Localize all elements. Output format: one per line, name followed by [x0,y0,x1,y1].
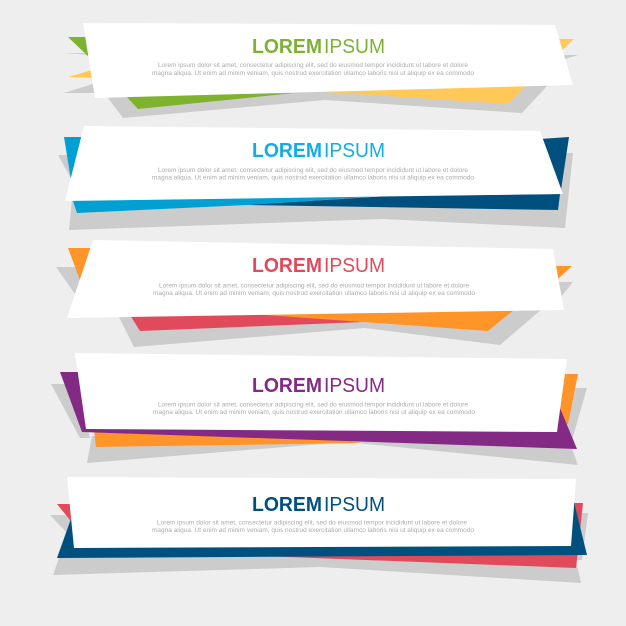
banner shadow [64,53,578,118]
body text [152,168,475,182]
body text: Lorem ipsum dolor sit amet, consectetur adipiscing elit, sed do eiusmod tempor incididunt ut labore et dolore [159,284,470,290]
white card [65,126,563,201]
heading: LOREM [252,375,322,397]
body text [152,63,475,77]
heading [252,494,385,516]
heading: LOREM [252,140,322,162]
heading: LOREM [252,494,322,516]
heading [252,36,385,58]
banner shadow [50,513,588,583]
panel: blue banner [58,126,573,230]
white card [75,353,567,432]
heading: LOREM [252,36,322,58]
panel: navy and red banner [50,477,588,583]
banner shadow [58,153,573,230]
body text: Lorem ipsum dolor sit amet, consectetur adipiscing elit, sed do eiusmod tempor incididunt ut labore et dolore [158,63,469,69]
white card [83,23,573,98]
heading: IPSUM [324,255,385,277]
banner shadow [56,267,573,347]
purple ribbon [60,372,577,449]
body text: Lorem ipsum dolor sit amet, consectetur adipiscing elit, sed do eiusmod tempor incididunt ut labore et dolore [158,402,469,408]
heading: IPSUM [324,375,385,397]
heading [252,140,385,162]
navy ribbon [57,502,587,558]
panel: red and orange banner [56,240,573,347]
body text: Lorem ipsum dolor sit amet, consectetur adipiscing elit, sed do eiusmod tempor incididunt ut labore et dolore [158,168,469,174]
dark blue ribbon [247,137,569,210]
heading: IPSUM [324,494,385,516]
orange ribbon [94,374,578,447]
body text: magna aliqua. Ut enim ad minim veniam, quis nostrud exercitation ullamco laboris nisi ut aliquip ex ea commodo [153,291,476,297]
heading [252,375,385,397]
red ribbon [57,503,583,568]
heading: IPSUM [324,36,385,58]
body text: magna aliqua. Ut enim ad minim veniam, quis nostrud exercitation ullamco laboris nisi ut aliquip ex ea commodo [152,71,475,77]
light blue ribbon [64,137,400,213]
banner shadow [51,384,587,465]
yellow ribbon [68,39,574,104]
body text: magna aliqua. Ut enim ad minim veniam, quis nostrud exercitation ullamco laboris nisi ut aliquip ex ea commodo [152,176,475,182]
red ribbon [130,312,363,331]
orange ribbon [68,248,572,331]
body text: magna aliqua. Ut enim ad minim veniam, quis nostrud exercitation ullamco laboris nisi ut aliquip ex ea commodo [152,528,475,534]
body text [153,284,476,297]
body text: magna aliqua. Ut enim ad minim veniam, quis nostrud exercitation ullamco laboris nisi ut aliquip ex ea commodo [153,410,476,416]
white card [67,477,576,548]
body text [153,402,476,416]
green ribbon [68,37,295,109]
body text [152,520,475,534]
panel: purple and orange banner [51,353,587,465]
panel: green and yellow banner [64,23,578,118]
heading [252,255,385,277]
heading: IPSUM [324,140,385,162]
heading: LOREM [252,255,322,277]
white card [67,240,564,318]
body text: Lorem ipsum dolor sit amet, consectetur adipiscing elit, sed do eiusmod tempor incididunt ut labore et dolore [157,520,468,526]
